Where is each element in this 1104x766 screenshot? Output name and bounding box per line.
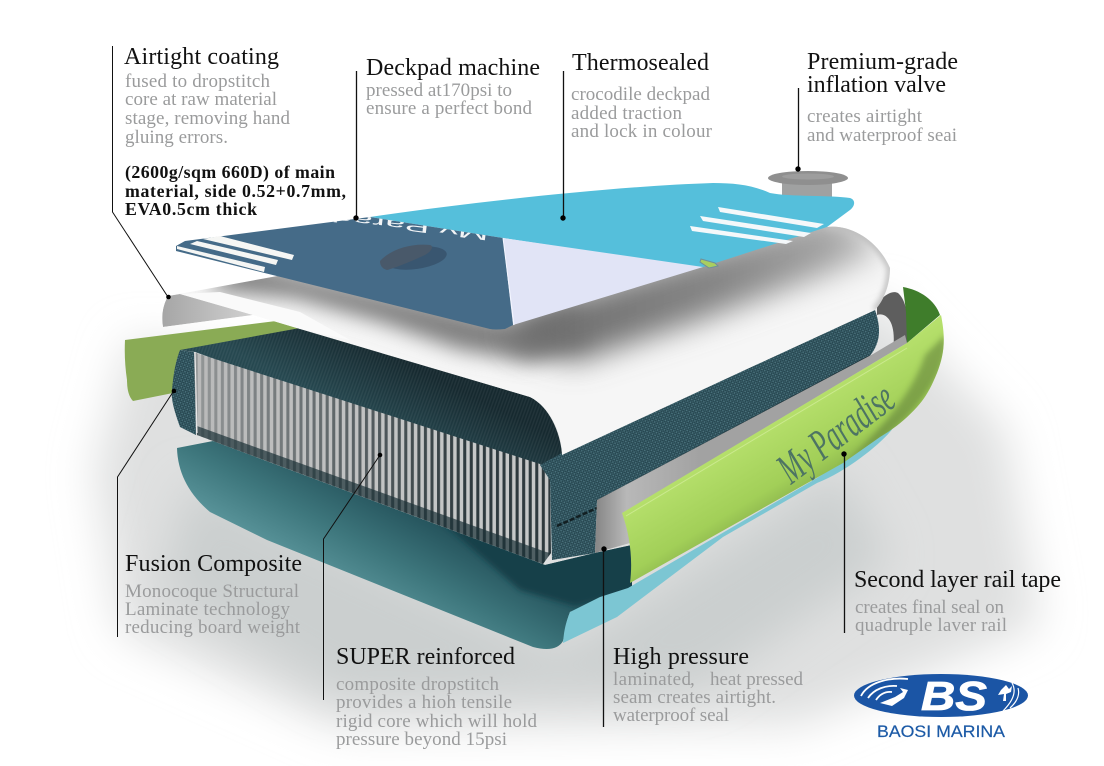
callout: thermosealed: and lock in colour [571, 121, 713, 142]
callout: inflation valve: creates airtight [807, 106, 923, 127]
dark shadow under core [445, 528, 632, 608]
callout: fusion composite: Monocoque Structural [125, 581, 299, 602]
board illustration [125, 171, 946, 655]
callout: deckpad machine: pressed at170psi to [366, 80, 512, 101]
deck lettering: My Paradise [283, 203, 489, 244]
callout: high pressure: , [690, 669, 695, 690]
callout: super reinforced: rigid core which will hold [336, 711, 538, 732]
leader line [112, 46, 168, 297]
silver top layer [162, 226, 890, 455]
deck stripes left [177, 236, 294, 272]
callout: airtight coating: core at raw material [125, 89, 277, 110]
core: side mesh right [540, 310, 879, 560]
callout: airtight coating: material, side 0.52+0.7mm, [125, 181, 346, 201]
deck: dark blue panel [176, 217, 513, 330]
callout: high pressure: waterproof seal [613, 705, 729, 726]
callout: high pressure: heat pressed [710, 669, 804, 690]
material specification: (2600g/sqm 660D) of main [125, 162, 335, 183]
callout: airtight coating: stage, removing hand [125, 108, 290, 129]
callout: fusion composite [118, 389, 302, 638]
grey rail loop [877, 292, 908, 350]
callout: airtight coating: EVA0.5cm thick [125, 199, 257, 219]
background shadow [95, 300, 1040, 728]
logo ellipse [854, 674, 1028, 717]
callout: super reinforced: composite dropstitch [336, 674, 500, 695]
silver shading across nose [510, 213, 878, 362]
callout: super reinforced [324, 453, 538, 750]
callout: thermosealed: added traction [571, 103, 682, 124]
small valve tag [700, 259, 718, 268]
logo monogram: BS [921, 673, 987, 719]
logo: Baosi Marina [854, 673, 1028, 741]
deck: lavender panel [503, 238, 703, 325]
callout: super reinforced: provides a hioh tensile [336, 692, 512, 713]
silver rim shading [827, 227, 890, 310]
core: side mesh left end [172, 350, 196, 435]
callout: high pressure: seam creates airtight. [613, 687, 776, 708]
callout: inflation valve: Premium-grade [807, 49, 958, 75]
deck handle [380, 243, 448, 273]
callout: inflation valve: inflation valve [807, 72, 946, 98]
deck: crocodile pad teal [370, 183, 854, 268]
callout: high pressure: High pressure [613, 644, 749, 670]
back of green rail tape [125, 318, 310, 401]
callout: inflation valve [795, 49, 958, 172]
heading: Airtight coating [124, 44, 279, 70]
callout: airtight coating: gluing errors. [125, 127, 228, 148]
green rail shading [848, 335, 944, 459]
deck stripes right [690, 207, 824, 244]
stitched seam [557, 508, 597, 526]
dark green inner rail [903, 287, 940, 343]
callout: high pressure: laminated [613, 669, 692, 690]
callout: second layer rail tape: quadruple laver rail [855, 615, 1007, 636]
callout: fusion composite: Laminate technology [125, 599, 290, 620]
callout: deckpad machine: ensure a perfect bond [366, 98, 532, 119]
bottom layer: teal base [170, 435, 640, 655]
callout: thermosealed [560, 50, 713, 221]
green rail tape [622, 315, 944, 583]
callout: high pressure [601, 546, 804, 727]
callout: fusion composite: reducing board weight [125, 617, 301, 638]
callout: deckpad machine [353, 55, 540, 221]
callout: super reinforced: pressure beyond 15psi [336, 729, 507, 750]
silver shading under deck [205, 262, 590, 362]
callout: thermosealed: crocodile deckpad [571, 84, 710, 105]
valve [768, 171, 848, 200]
callout: second layer rail tape: Second layer rail tape [854, 567, 1061, 593]
dropstitch core: fibres [193, 352, 551, 564]
callout: inflation valve: and waterproof seai [807, 125, 957, 146]
callout: fusion composite: Fusion Composite [125, 551, 302, 577]
callout: thermosealed: Thermosealed [572, 50, 709, 76]
callout: deckpad machine: Deckpad machine [366, 55, 540, 81]
callout: second layer rail tape: creates final seal on [855, 597, 1004, 618]
logo wordmark: BAOSI MARINA [877, 722, 1006, 741]
rail lettering: My Paradise [767, 373, 904, 493]
light blue base edge [563, 428, 893, 643]
description: fused to dropstitch [125, 71, 270, 92]
grey seam tape [595, 335, 907, 553]
silver folded left corner [162, 294, 253, 327]
callout: super reinforced: SUPER reinforced [336, 644, 515, 670]
callout: airtight coating [112, 44, 346, 299]
callout: second layer rail tape [841, 451, 1061, 636]
dropstitch core: mesh top [180, 328, 562, 480]
